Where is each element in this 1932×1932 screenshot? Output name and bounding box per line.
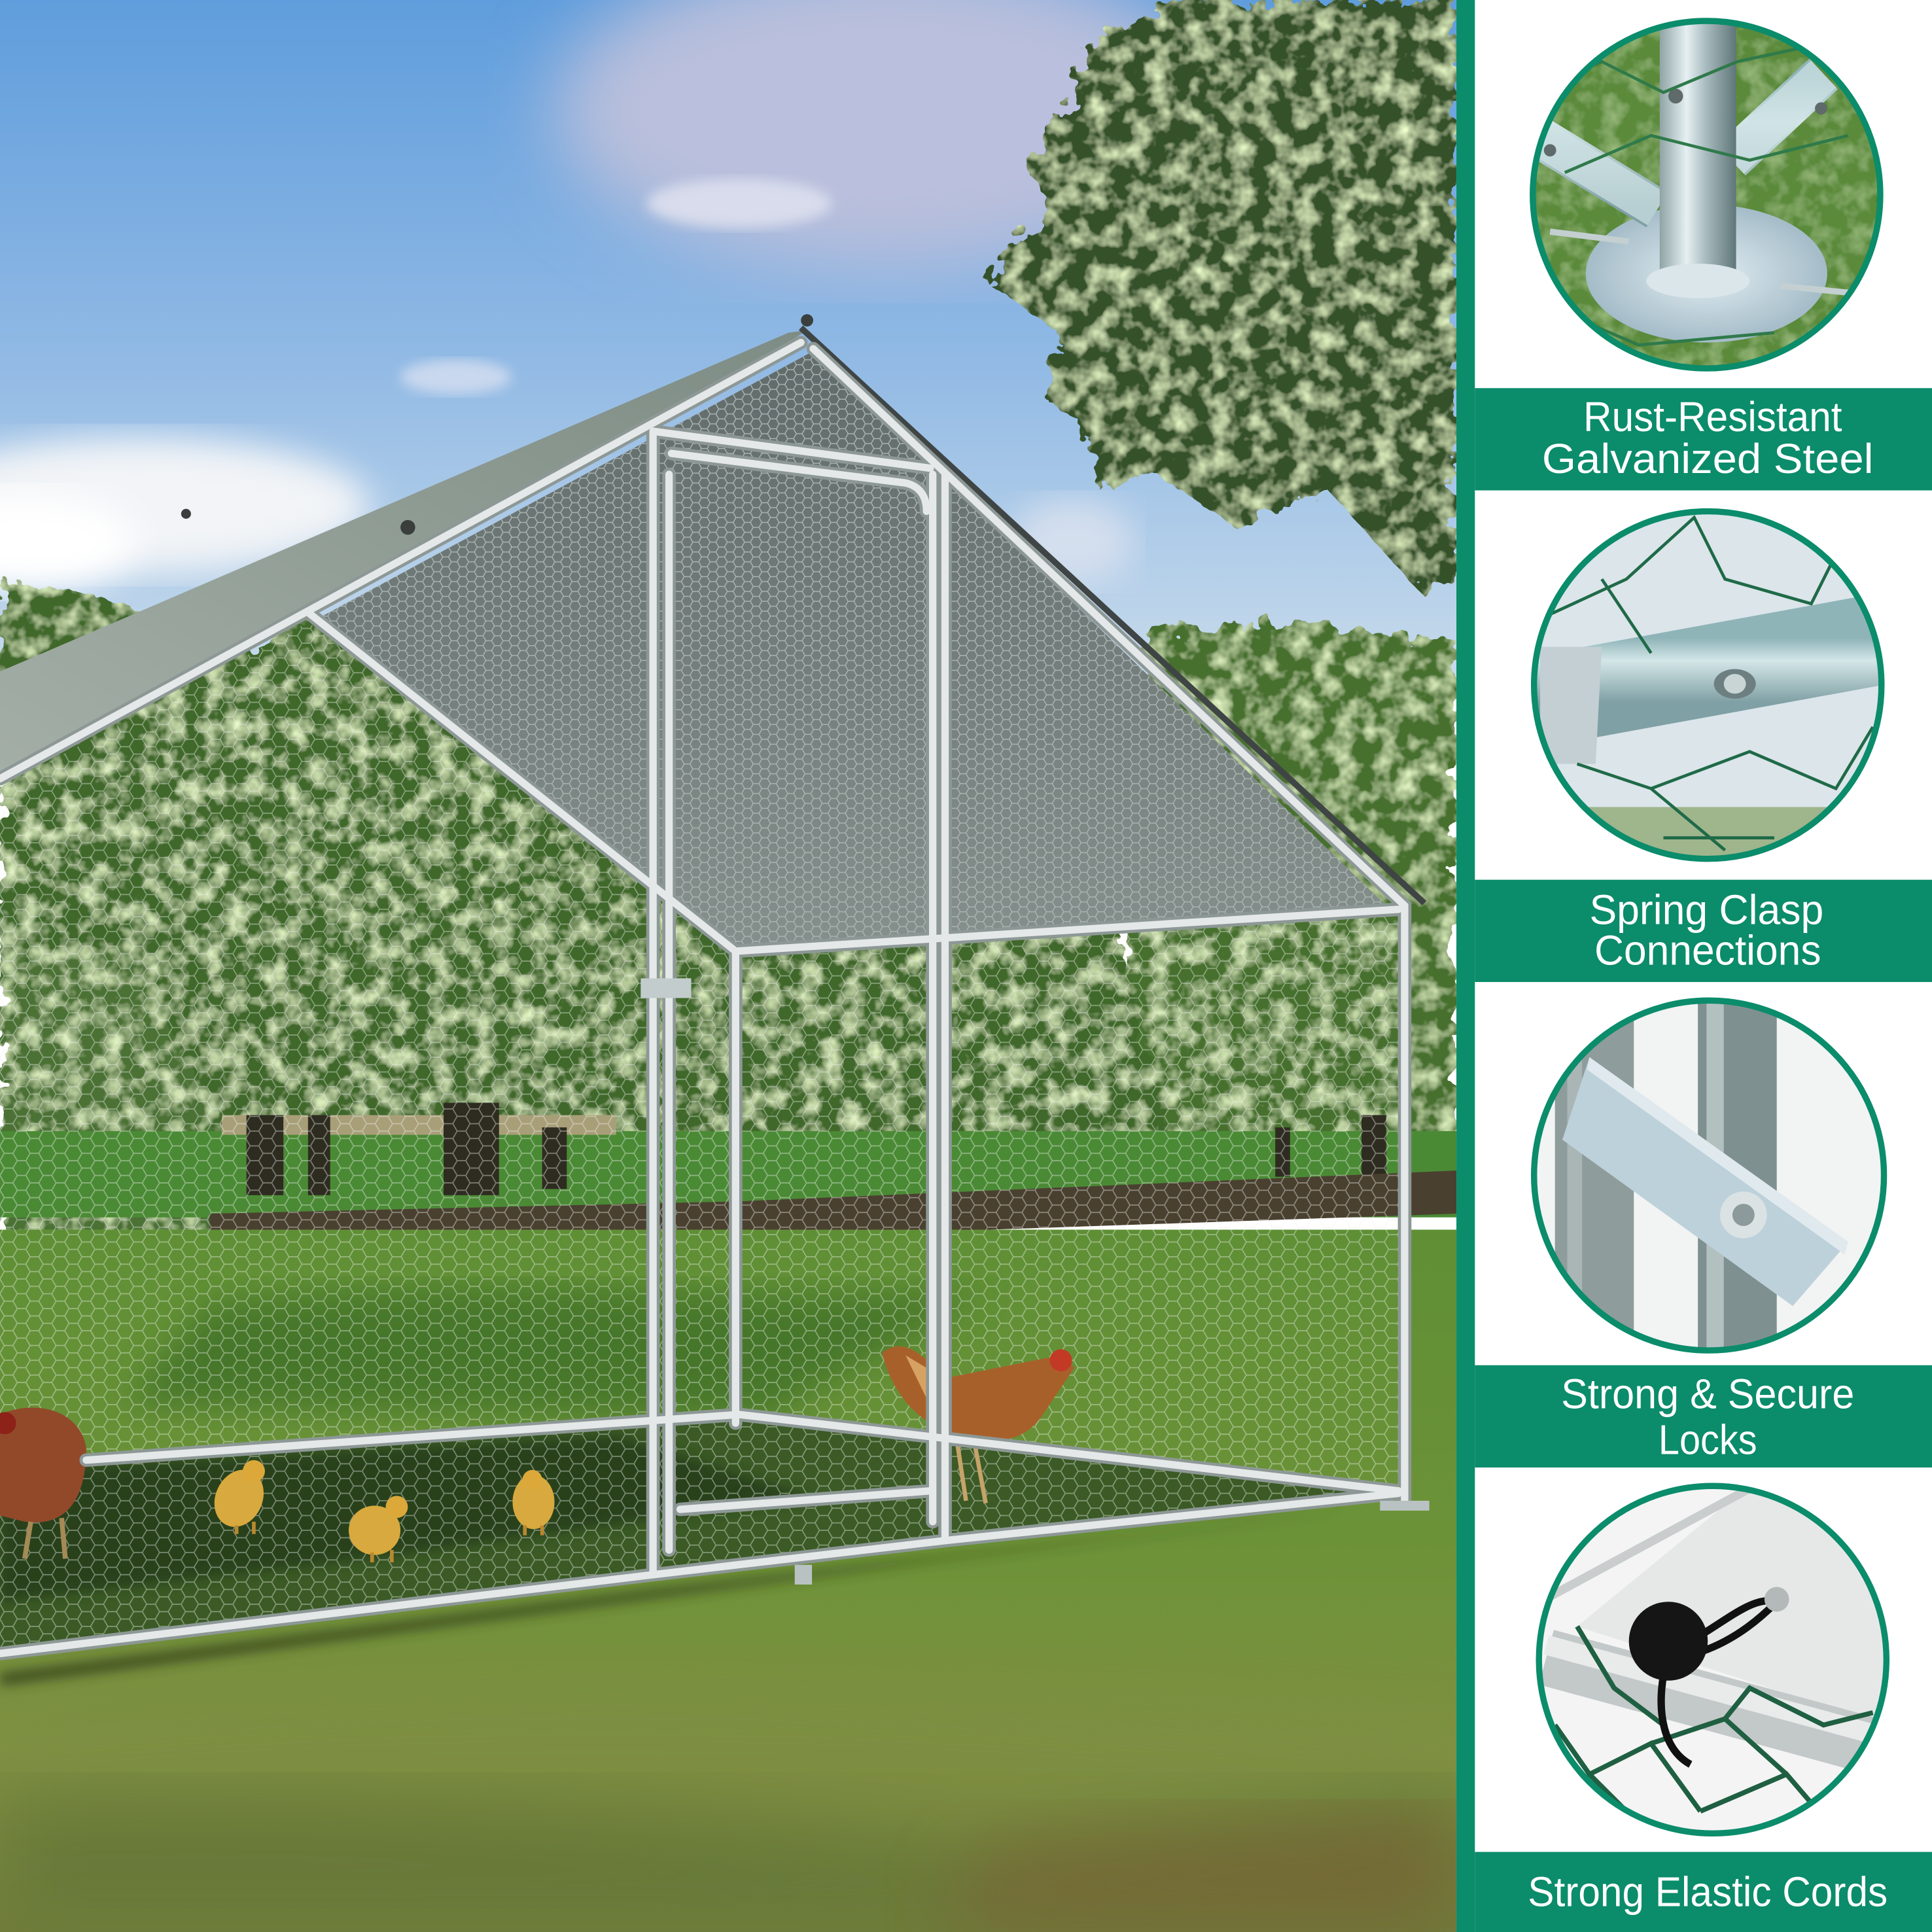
roof cover (0, 330, 807, 774)
chick 3 (512, 1470, 554, 1536)
roof dark edge (801, 328, 1424, 903)
chick 1 (205, 1460, 273, 1535)
label bar (1475, 388, 1932, 491)
heading: Spring Clasp (1589, 886, 1823, 933)
panel: rust-resistant steel (1475, 17, 1932, 491)
inset circle: steel post base (1528, 17, 1885, 375)
inset circle: elastic cord and ball (1534, 1479, 1897, 1842)
label bar (1475, 1365, 1932, 1467)
steel frame (0, 343, 1405, 1653)
heading (1542, 393, 1874, 482)
wire mesh walls (0, 622, 1402, 1653)
shade cloth gable (318, 351, 1386, 951)
panel: product photo (0, 0, 1456, 1932)
chick 2 (349, 1496, 408, 1562)
heading: Strong Elastic Cords (1528, 1868, 1888, 1915)
heading: Locks (1659, 1416, 1757, 1463)
roof knobs (181, 314, 813, 535)
label bar (1475, 1852, 1932, 1932)
floor shadow (0, 1435, 813, 1602)
inset circle: clasp tube (1528, 505, 1891, 869)
ground shadow (0, 1509, 1356, 1685)
door latch (641, 978, 692, 998)
heading (1589, 886, 1823, 974)
hen left (0, 1408, 86, 1558)
sky (0, 0, 1456, 690)
inset circle: lock bracket (1528, 996, 1891, 1359)
heading: Strong & Secure (1561, 1371, 1854, 1418)
heading: Rust-Resistant (1583, 393, 1842, 440)
hen right (882, 1346, 1074, 1503)
ground (0, 1103, 1456, 1932)
green side stripe (1456, 0, 1475, 1932)
clouds (0, 0, 1220, 591)
ground brackets (795, 1501, 1430, 1585)
heading: Connections (1594, 927, 1821, 974)
coop floor (0, 1417, 1392, 1649)
panel: secure locks (1475, 996, 1932, 1467)
panel: spring clasp (1475, 505, 1932, 982)
panel: elastic cords (1475, 1479, 1932, 1932)
gable mesh (318, 351, 1386, 951)
hedge background (0, 579, 1456, 1244)
label bar (1475, 880, 1932, 982)
heading: Galvanized Steel (1542, 435, 1874, 482)
heading (1561, 1371, 1854, 1463)
tree (986, 0, 1456, 589)
